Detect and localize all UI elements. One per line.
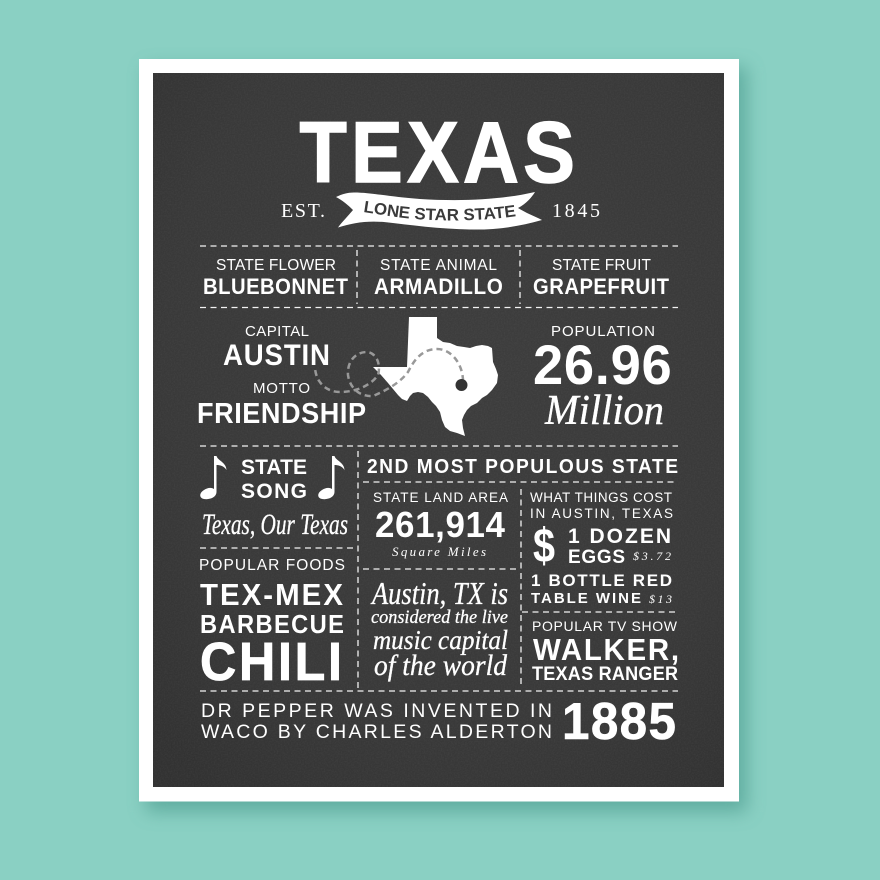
population: 26.96 (533, 333, 672, 396)
popular foods: TEX-MEX (200, 578, 343, 612)
motto: FRIENDSHIP (197, 397, 366, 429)
cost of living: $3.72 (633, 549, 671, 563)
icon: dollar sign: $ (533, 520, 555, 573)
icon: left music note (200, 456, 226, 499)
dr pepper fact: DR PEPPER WAS INVENTED IN (201, 700, 552, 722)
austin music quote: music capital (373, 625, 508, 655)
cost of living: TABLE WINE (531, 590, 641, 607)
cost of living: 1 BOTTLE RED (531, 571, 672, 590)
capital: CAPITAL (245, 323, 309, 340)
popular tv show: POPULAR TV SHOW (532, 618, 678, 634)
population: Million (544, 388, 664, 434)
austin music quote (370, 575, 508, 682)
land area (373, 490, 508, 559)
banner text: LONE STAR STATE (364, 201, 516, 220)
state fruit: STATE FRUIT (552, 257, 652, 274)
dr pepper fact: WACO BY CHARLES ALDERTON (201, 721, 552, 743)
cost of living: $13 (649, 592, 672, 606)
map silhouette (373, 317, 498, 436)
banner (336, 192, 542, 230)
state fruit: GRAPEFRUIT (533, 275, 669, 299)
land area: STATE LAND AREA (373, 490, 508, 505)
est label: EST. (281, 200, 325, 222)
land area: Square Miles (392, 544, 486, 559)
population rank heading: 2ND MOST POPULOUS STATE (367, 456, 678, 478)
austin music quote: Austin, TX is (370, 575, 508, 611)
cost of living: EGGS (568, 547, 625, 568)
state song: Texas, Our Texas (202, 508, 348, 541)
popular tv show: WALKER, (533, 633, 679, 667)
dr pepper fact (201, 692, 676, 750)
austin music quote: of the world (374, 649, 508, 682)
land area: 261,914 (375, 505, 505, 545)
capital (223, 323, 330, 372)
austin music quote: considered the live (371, 607, 508, 628)
capital: AUSTIN (223, 339, 330, 372)
dashed grid (200, 246, 678, 691)
white poster frame (139, 59, 739, 802)
popular tv show (532, 618, 679, 684)
popular foods (199, 557, 345, 692)
icon: right music note (318, 456, 344, 499)
popular foods: BARBECUE (200, 611, 344, 639)
cost of living: 1 DOZEN (568, 525, 671, 548)
texas map with route (315, 317, 498, 436)
cost of living (530, 490, 673, 607)
popular foods: POPULAR FOODS (199, 557, 345, 574)
popular foods: CHILI (200, 632, 342, 692)
state animal (374, 257, 503, 299)
state song: STATE (241, 456, 307, 479)
title: TEXAS (300, 105, 575, 201)
founding year: 1845 (552, 200, 600, 222)
population (533, 323, 672, 434)
state flower: BLUEBONNET (203, 275, 348, 299)
dashed route (315, 349, 463, 396)
population: POPULATION (551, 323, 655, 340)
state song: SONG (241, 480, 307, 503)
state fruit (533, 257, 669, 299)
austin dot (456, 379, 468, 391)
state animal: STATE ANIMAL (380, 257, 497, 274)
chalkboard panel (153, 73, 724, 787)
established row with banner (281, 192, 600, 230)
popular tv show: TEXAS RANGER (532, 663, 678, 684)
motto: MOTTO (253, 380, 310, 397)
state animal: ARMADILLO (374, 274, 503, 299)
motto (197, 380, 366, 429)
state flower (203, 257, 348, 299)
cost of living: WHAT THINGS COST (530, 490, 672, 505)
state song (200, 456, 348, 541)
frame shadow (146, 67, 747, 812)
cost of living: IN AUSTIN, TEXAS (530, 506, 673, 521)
state flower: STATE FLOWER (216, 257, 336, 274)
dr pepper fact: 1885 (562, 692, 676, 750)
